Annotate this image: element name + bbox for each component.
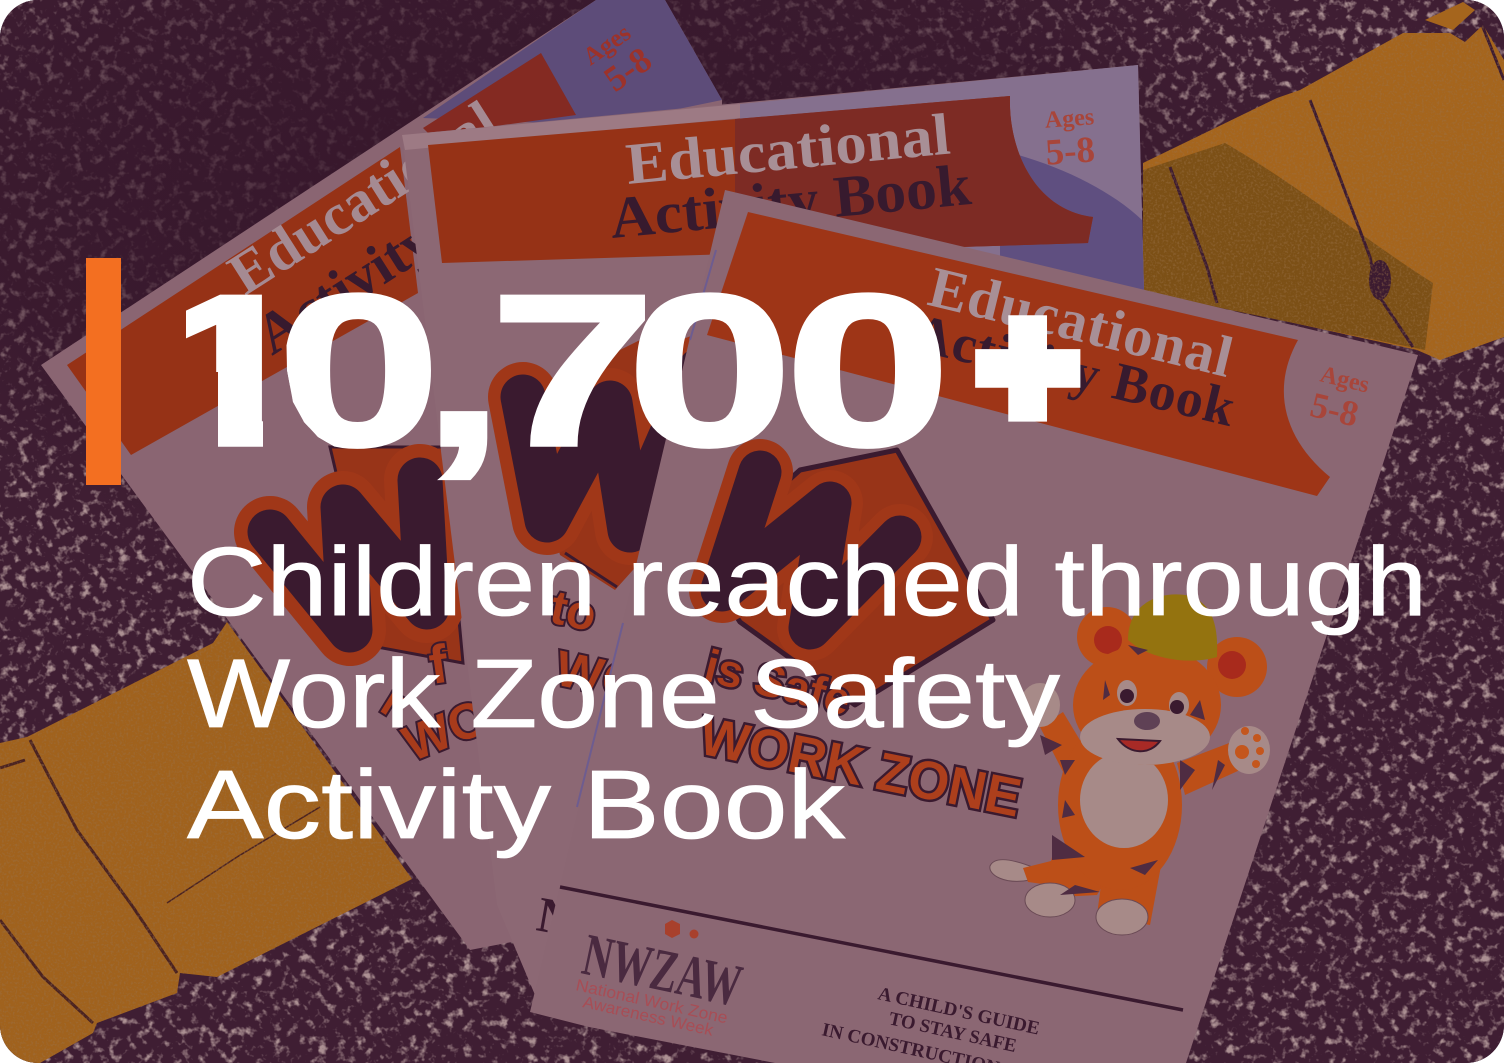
age label on middle book: 5-8 <box>1044 129 1096 174</box>
lavender paper tone <box>740 65 1144 290</box>
age label: 5-8 <box>1306 384 1363 435</box>
small lettering on middle book: to <box>546 581 601 642</box>
cover tagline: A CHILD'S GUIDE <box>876 983 1042 1040</box>
cover tagline <box>820 983 1069 1063</box>
curb: bottom left <box>0 622 412 1063</box>
W diamond sign <box>700 450 993 705</box>
W letter on back book <box>270 480 427 630</box>
hard hat <box>1128 594 1217 661</box>
orange band on front book <box>707 212 1330 496</box>
logo: NWZAW <box>574 920 748 1040</box>
head <box>1073 645 1221 765</box>
small lettering on middle book <box>546 581 647 713</box>
is safe text: is Safe <box>700 639 856 726</box>
legs <box>1042 845 1120 898</box>
arms <box>1040 712 1095 805</box>
shadowed corner of back book <box>423 0 722 125</box>
logo fragment on middle book: N <box>533 886 578 947</box>
age label on middle book <box>1044 104 1096 174</box>
work zone lettering: WORK ZONE <box>695 706 1026 829</box>
curb cracks <box>0 740 177 1023</box>
small lettering on back book: WO <box>395 688 496 772</box>
left edge highlight <box>577 250 716 807</box>
title lines: Educational <box>923 254 1240 390</box>
age label: Ages <box>1318 362 1372 398</box>
curb chip <box>1425 2 1475 30</box>
W letter <box>722 472 900 628</box>
line 1: Children reached through <box>187 527 1427 636</box>
sign edge on middle book <box>565 553 617 587</box>
body stripes <box>1040 735 1225 895</box>
book: front <box>530 190 1418 1063</box>
top sheet border <box>402 104 740 150</box>
orange band on back book <box>67 147 418 455</box>
tail base <box>1023 860 1055 885</box>
icon: tiger mascot <box>990 594 1270 935</box>
title on middle book <box>607 101 974 251</box>
divider line on front cover <box>560 887 1183 1010</box>
age label on back book: Ages <box>578 19 636 71</box>
small lettering on back book <box>373 634 496 772</box>
line 2: Work Zone Safety <box>187 639 1061 748</box>
W sign on middle book <box>520 330 692 590</box>
shadow on band <box>735 96 1093 254</box>
W letter on middle book <box>523 370 700 530</box>
W sign on back book <box>330 447 463 663</box>
age label on middle book: Ages <box>1044 104 1095 134</box>
title on back book: Activity Book <box>244 129 566 367</box>
cover tagline: TO STAY SAFE <box>887 1008 1018 1057</box>
curb: top right <box>1143 2 1504 360</box>
curb cracks <box>1170 20 1504 347</box>
big number: + <box>978 272 1077 462</box>
age label <box>1306 361 1372 435</box>
head stripes <box>1103 645 1205 720</box>
small lettering on back book: r <box>373 677 413 728</box>
title on middle book: Activity Book <box>607 151 974 251</box>
title on middle book: Educational <box>623 101 953 197</box>
mouth <box>1118 739 1160 751</box>
big number: 10,700 <box>149 250 951 491</box>
paws <box>1020 683 1060 727</box>
book: back left <box>41 0 730 950</box>
logo caption: National Work Zone <box>574 976 729 1027</box>
logo caption: Awareness Week <box>581 993 716 1040</box>
nose <box>1134 712 1160 730</box>
shadow on curb <box>1143 143 1433 350</box>
small lettering on back book: f <box>425 634 452 696</box>
title on back book: Educational <box>217 87 509 307</box>
age label on back book: 5-8 <box>597 39 659 99</box>
logo sign and flagger <box>665 920 698 938</box>
body <box>1058 720 1182 890</box>
description text <box>187 527 1427 859</box>
book: middle <box>402 65 1144 995</box>
band labels on front book <box>907 253 1375 467</box>
line 3: Activity Book <box>187 750 846 859</box>
accent bar <box>86 258 121 485</box>
shadow across middle book <box>1000 150 1144 290</box>
small lettering on middle book: WO <box>551 640 647 713</box>
big number <box>186 292 1080 480</box>
tail <box>990 860 1035 881</box>
age label on back book <box>578 19 659 102</box>
title lines: Activity Book <box>907 302 1242 438</box>
band of back book (shadowed) <box>423 53 576 135</box>
logo wordmark: NWZAW <box>577 921 748 1019</box>
orange band on middle book <box>428 96 1093 263</box>
feet <box>1025 883 1075 917</box>
belly <box>1080 752 1168 848</box>
eyes <box>1117 680 1137 706</box>
muzzle <box>1080 709 1210 765</box>
ears <box>1077 607 1137 667</box>
